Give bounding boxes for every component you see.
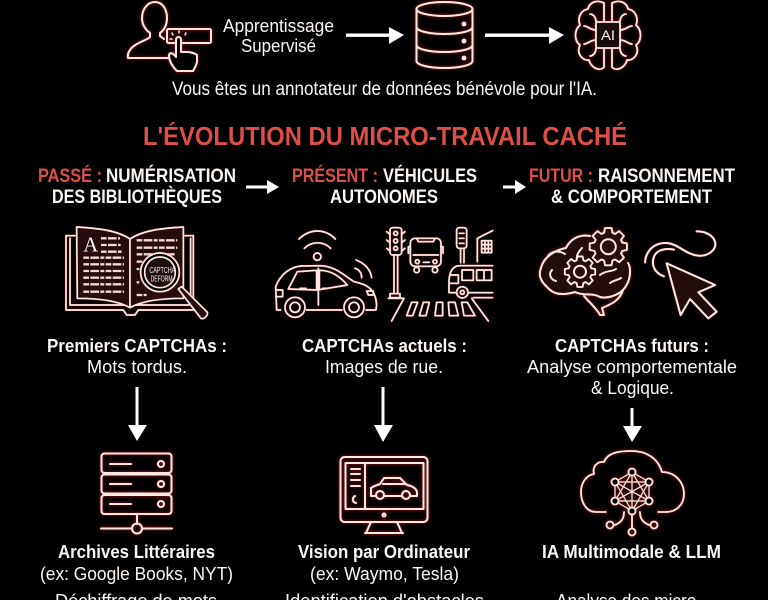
icon: cloud neural network xyxy=(581,451,684,536)
column heading: passé xyxy=(38,165,236,208)
column heading: futur: & COMPORTEMENT xyxy=(551,187,712,208)
title: L'ÉVOLUTION DU MICRO-TRAVAIL CACHÉ xyxy=(143,121,627,151)
column heading: passé: NUMÉRISATION xyxy=(106,165,236,187)
column heading: présent: VÉHICULES xyxy=(383,165,477,187)
column heading: présent: PRÉSENT : xyxy=(292,165,378,187)
column heading: présent: AUTONOMES xyxy=(330,187,438,208)
column heading: passé: PASSÉ : xyxy=(38,165,102,187)
column heading: futur xyxy=(529,166,735,208)
icon: street scene xyxy=(387,228,493,321)
text: captchas futurs: & Logique. xyxy=(591,377,674,398)
text: premiers captchas: Premiers CAPTCHAs : xyxy=(47,335,227,356)
icon: person clicking a button xyxy=(128,2,211,71)
arrow: passé to présent xyxy=(246,180,279,194)
caption: annotateur: Vous êtes un annotateur de données bénévole pour l'IA. xyxy=(172,79,597,100)
icon: AI brain xyxy=(576,1,640,69)
text: captchas actuels xyxy=(302,335,467,377)
arrow: down to archives xyxy=(128,387,147,441)
text: captchas futurs xyxy=(527,335,737,398)
arrow: to AI brain xyxy=(485,27,564,44)
icon: open book with magnifier: CAPTCHA xyxy=(149,265,176,275)
icon: server xyxy=(101,454,172,534)
arrow: down to multimodal AI xyxy=(623,408,642,442)
icon: monitor with car xyxy=(340,457,428,533)
arrow: down to vision xyxy=(374,387,393,442)
icon: autonomous car with wifi xyxy=(276,231,377,317)
text: captchas futurs: CAPTCHAs futurs : xyxy=(555,335,709,356)
icon: AI brain: AI xyxy=(601,27,615,43)
column heading: passé: DES BIBLIOTHÈQUES xyxy=(52,186,222,208)
icon: database xyxy=(416,2,472,68)
column heading: futur: FUTUR : xyxy=(529,166,593,187)
text: IA multimodale: IA Multimodale & LLM xyxy=(542,541,721,562)
text: archives littéraires xyxy=(40,541,233,600)
icon: open book with magnifier xyxy=(66,227,207,319)
label: apprentissage supervisé: Supervisé xyxy=(241,36,316,56)
text: IA multimodale xyxy=(542,541,721,600)
text: vision par ordinateur: (ex: Waymo, Tesla) xyxy=(310,563,459,584)
text: premiers captchas: Mots tordus. xyxy=(87,356,187,377)
icon: cursor with motion trail xyxy=(645,231,717,318)
column heading: futur: RAISONNEMENT xyxy=(598,166,735,187)
icon: open book with magnifier: A xyxy=(83,235,98,257)
arrow: to database xyxy=(346,27,404,44)
column heading: présent xyxy=(292,165,477,208)
label: apprentissage supervisé: Apprentissage xyxy=(223,16,334,36)
text: captchas futurs: Analyse comportementale xyxy=(527,356,737,377)
icon: open book with magnifier: DEFORM xyxy=(151,274,173,284)
text: archives littéraires: Archives Littéraires xyxy=(58,541,215,562)
arrow: présent to futur xyxy=(503,180,526,194)
text: premiers captchas xyxy=(47,335,227,377)
text: vision par ordinateur: Vision par Ordinateur xyxy=(298,541,470,562)
text: captchas actuels: Images de rue. xyxy=(325,356,443,377)
text: vision par ordinateur xyxy=(285,541,484,600)
icon: brain with gears xyxy=(540,228,630,315)
text: archives littéraires: (ex: Google Books, NYT) xyxy=(40,563,233,584)
text: captchas actuels: CAPTCHAs actuels : xyxy=(302,335,467,356)
